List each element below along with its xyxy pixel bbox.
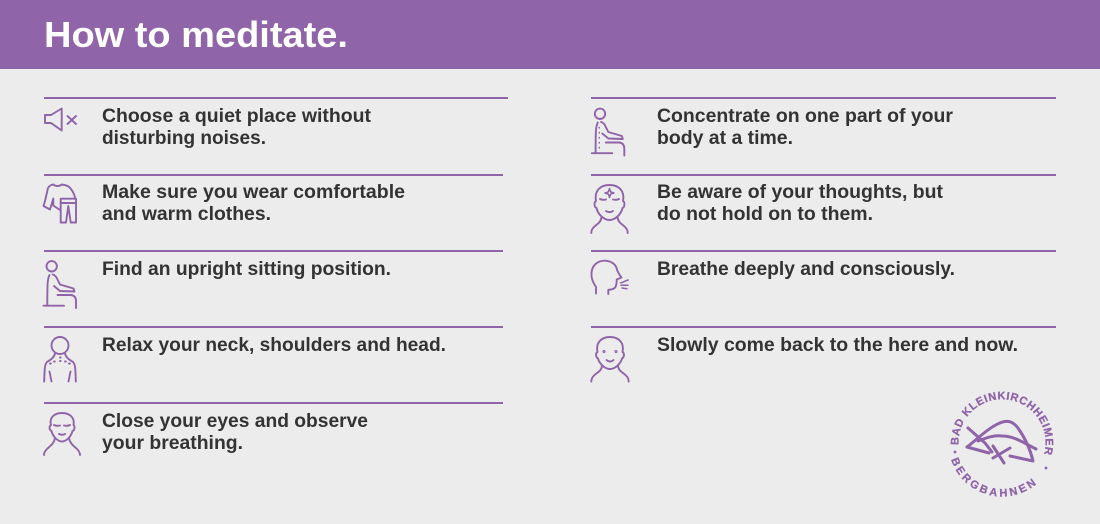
step: comfortable clothes	[44, 182, 405, 225]
step: relax neck	[44, 335, 446, 382]
text: quiet place: disturbing noises.	[102, 128, 266, 149]
icon: face with closed eyes	[44, 413, 80, 455]
step: come back	[591, 335, 1018, 382]
text: comfortable clothes	[102, 182, 405, 225]
step: breathe	[591, 259, 955, 294]
text: one body part: Concentrate on one part of your	[657, 106, 954, 127]
text: upright sitting: Find an upright sitting position.	[102, 259, 391, 280]
step: one body part	[592, 106, 954, 156]
logo ring text: BAD KLEINKIRCHHEIMER	[950, 392, 1054, 455]
text: close eyes: Close your eyes and observe	[102, 411, 368, 432]
icon: face with open eyes	[591, 337, 629, 382]
text: quiet place	[102, 106, 372, 149]
text: thoughts: Be aware of your thoughts, but	[657, 182, 944, 203]
text: comfortable clothes: and warm clothes.	[102, 204, 271, 225]
icon: face with third eye star	[591, 185, 628, 233]
text: breathe: Breathe deeply and consciously.	[657, 259, 955, 280]
logo mountain mark	[967, 421, 1036, 463]
icon: head profile breathing	[591, 261, 628, 294]
text: close eyes	[102, 411, 368, 454]
icon: neck and shoulders	[44, 337, 76, 382]
text: comfortable clothes: Make sure you wear comfortable	[102, 182, 405, 203]
step: close eyes	[44, 411, 368, 455]
header banner	[0, 0, 1100, 69]
text: close eyes: your breathing.	[102, 433, 243, 454]
icon: seated person	[44, 261, 76, 308]
text: relax neck: Relax your neck, shoulders and head.	[102, 335, 446, 356]
text: come back: Slowly come back to the here and now.	[657, 335, 1018, 356]
step: thoughts	[591, 182, 944, 233]
text: quiet place: Choose a quiet place without	[102, 106, 372, 127]
text: one body part	[657, 106, 954, 149]
icon: muted speaker	[45, 108, 76, 130]
text: one body part: body at a time.	[657, 128, 793, 149]
text: thoughts: do not hold on to them.	[657, 204, 873, 225]
step: upright sitting	[44, 259, 391, 308]
title: How to meditate.	[44, 14, 348, 55]
logo: Bad Kleinkirchheimer Bergbahnen	[950, 392, 1054, 497]
text: thoughts	[657, 182, 944, 225]
logo ring text	[950, 392, 1054, 497]
icon: seated person with spine dots	[592, 109, 624, 156]
step: quiet place	[45, 106, 372, 149]
icon: sweater and trousers	[44, 184, 76, 222]
logo ring text: BERGBAHNEN	[951, 457, 1036, 497]
